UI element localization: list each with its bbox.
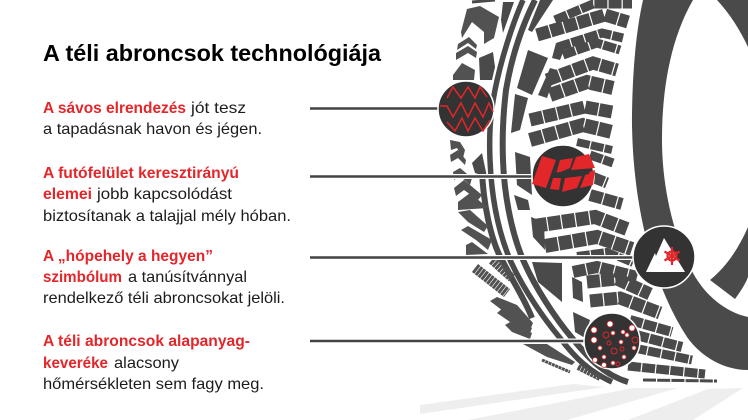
callout line 3 <box>310 255 636 260</box>
text block: snowflake symbol: szimbólum <box>43 269 122 286</box>
text block: compound <box>43 333 264 393</box>
text block: snowflake symbol: A „hópehely a hegyen” <box>43 248 213 265</box>
text block: compound: A téli abroncsok alapanyag- <box>43 333 250 350</box>
text block: lanes: jót tesz <box>190 100 246 117</box>
text block: cross elements: elemei <box>43 186 92 203</box>
icon: zigzag sipes <box>438 81 494 137</box>
callout line 4 <box>310 338 586 344</box>
icon: compound particles <box>584 313 640 369</box>
icon: mountain snowflake symbol <box>633 226 695 288</box>
text block: compound: hőmérsékleten sem fagy meg. <box>43 376 264 393</box>
text block: snowflake symbol: rendelkező téli abroncsokat jelöli. <box>43 290 285 307</box>
text block: cross elements: jobb kapcsolódást <box>96 186 233 203</box>
tread: left shoulder hatch blocks <box>450 0 600 378</box>
text block: cross elements <box>43 165 291 225</box>
title: A téli abroncsok technológiája <box>43 40 381 66</box>
text block: cross elements: biztosítanak a talajjal mély hóban. <box>43 208 291 225</box>
callout line 2 <box>310 174 535 179</box>
text block: cross elements: A futófelület keresztirányú <box>43 165 239 182</box>
road stripes <box>420 384 743 420</box>
tire rim arcs <box>710 0 748 299</box>
tread: right chevron blocks <box>511 4 717 381</box>
tire sidewall band <box>632 0 748 370</box>
text block: lanes: a tapadásnak havon és jégen. <box>43 121 262 138</box>
text block: compound: alacsony <box>114 355 179 372</box>
icon: red tread blocks <box>532 145 595 207</box>
tread: longitudinal grooves <box>482 0 628 382</box>
text block: lanes: A sávos elrendezés <box>43 100 186 117</box>
text block: snowflake symbol <box>43 248 285 307</box>
text block: lanes <box>43 100 262 138</box>
callout line 1 <box>310 107 440 110</box>
text block: snowflake symbol: a tanúsítvánnyal <box>128 269 247 286</box>
text block: compound: keveréke <box>43 355 108 372</box>
